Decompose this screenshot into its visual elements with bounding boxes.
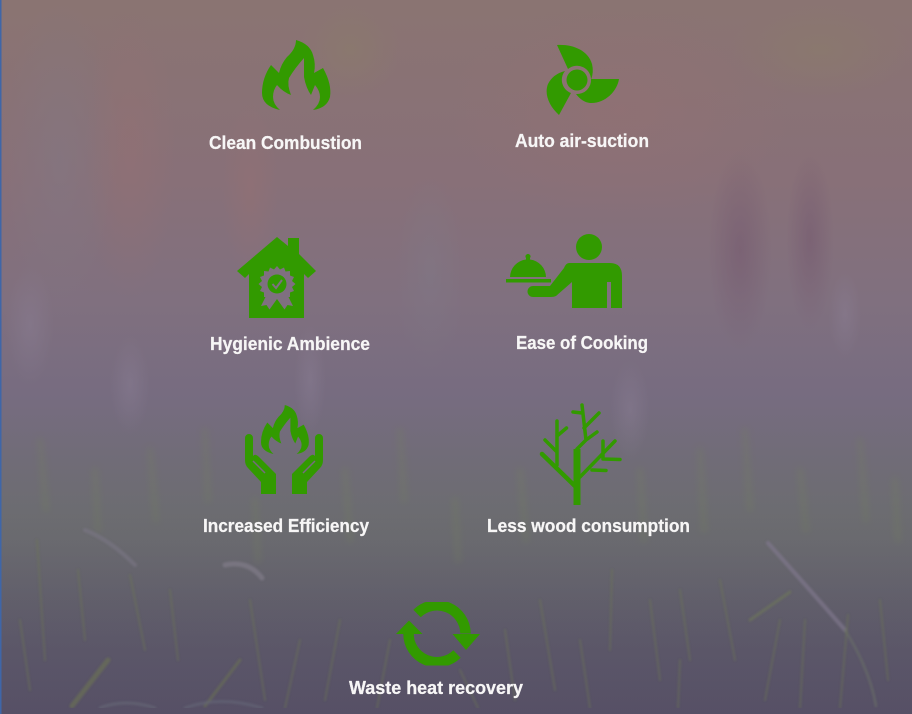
heading: Auto air-suction: Auto air-suction <box>515 131 649 151</box>
heading: Hygienic Ambience: Hygienic Ambience <box>210 334 370 354</box>
icon: fan for air suction <box>547 45 619 115</box>
heading: Increased Efficiency: Increased Efficiency <box>203 516 369 536</box>
icon: clean combustion flame <box>262 40 330 110</box>
icon: server with cloche <box>506 234 622 308</box>
left edge blue line <box>0 0 2 714</box>
heading: Less wood consumption: Less wood consumption <box>487 516 690 536</box>
icon: house with seal <box>237 237 316 318</box>
heading: Waste heat recovery: Waste heat recovery <box>349 678 523 698</box>
icon: tree <box>542 405 620 505</box>
icon: heat recovery arrows <box>396 605 480 662</box>
heading: Clean Combustion: Clean Combustion <box>209 133 362 153</box>
heading: Ease of Cooking: Ease of Cooking <box>516 333 648 353</box>
icon: hands holding flame <box>245 405 323 494</box>
